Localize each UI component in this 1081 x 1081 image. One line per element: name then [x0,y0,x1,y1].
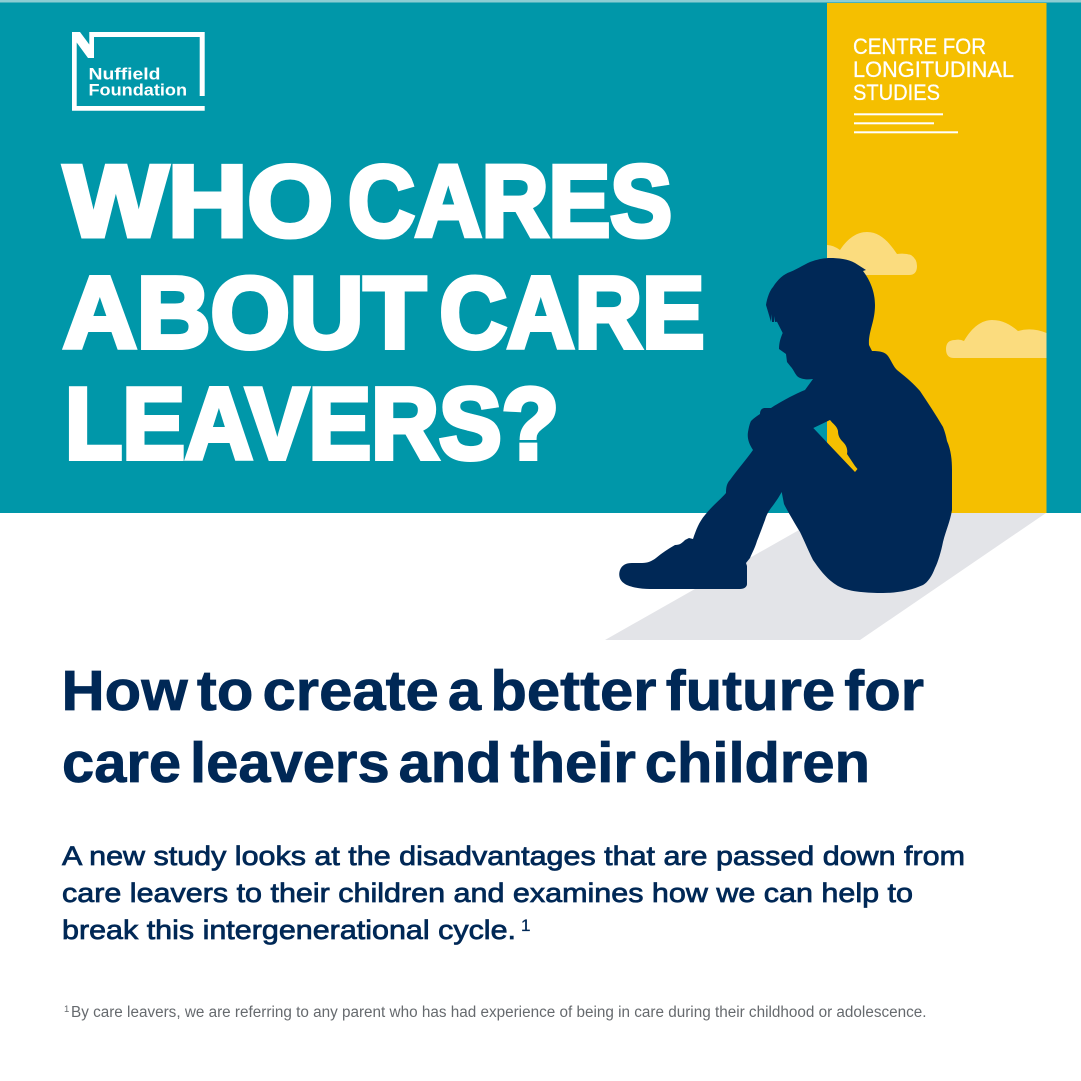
logo: Nuffield Foundation: Foundation [88,82,187,100]
title: LEAVERS? [65,368,559,480]
body text: 1 [521,916,530,935]
footnote: 1 [64,1004,69,1015]
footnote: By care leavers, we are referring to any parent who has had experience of being in care during their childhood or adolescence. [71,1004,926,1021]
panel: teal header [0,2,1081,513]
logo: Nuffield Foundation [72,32,205,111]
body text: A new study looks at the disadvantages that are passed down from [62,841,965,871]
logo: Centre for Longitudinal Studies: LONGITUDINAL [853,57,1014,82]
panel: yellow doorway [827,3,1046,513]
subheading: care leavers and their children [62,731,870,794]
logo: Centre for Longitudinal Studies: CENTRE FOR [853,34,986,59]
title: CARES [348,146,672,258]
subheading: How to create a better future for [62,659,924,722]
icon: upper cloud [827,232,917,275]
logo: Nuffield Foundation: Nuffield [88,66,160,84]
title: CARE [440,258,704,370]
logo: Centre for Longitudinal Studies [853,34,1014,133]
title [63,146,704,480]
icon: lower cloud [946,320,1046,358]
subheading [62,659,924,794]
title: WHO [64,146,333,258]
body text [62,841,965,945]
body text: break this intergenerational cycle. [62,915,516,945]
body text: care leavers to their children and examines how we can help to [62,878,913,908]
floor shadow [605,513,1046,640]
logo: Centre for Longitudinal Studies: STUDIES [853,80,940,105]
illustration: silhouette of a seated child [619,258,952,593]
title: ABOUT [63,258,426,370]
